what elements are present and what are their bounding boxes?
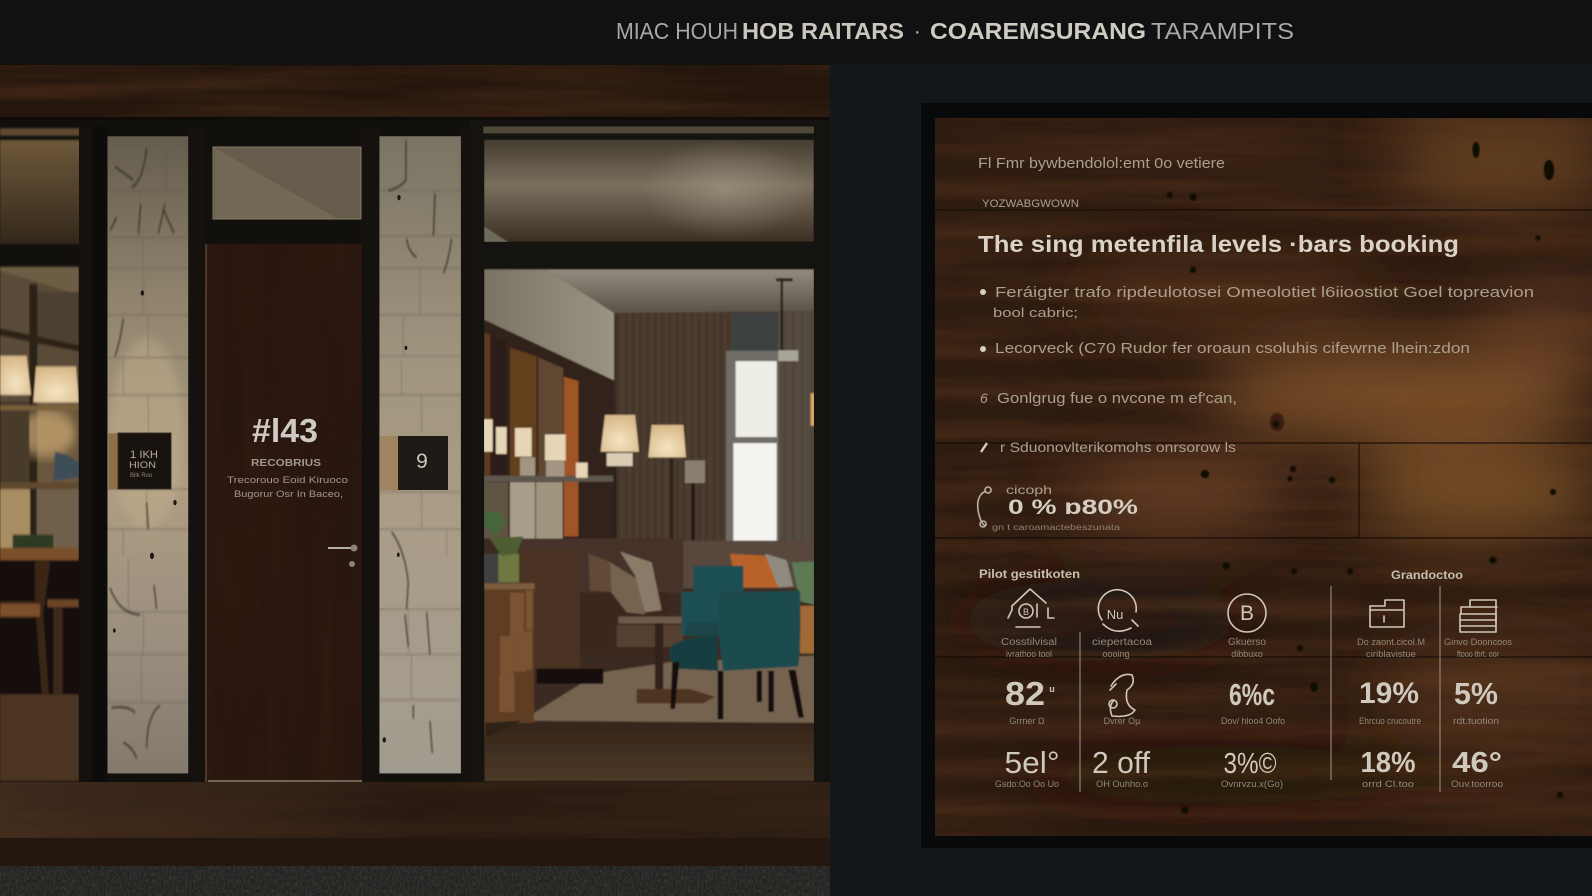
row two captions: rdt.tuotion [1453, 716, 1499, 726]
board wood [935, 115, 1592, 836]
wall sign: left: HION [129, 460, 156, 470]
row two captions [1009, 716, 1499, 726]
window frame bars [470, 120, 830, 800]
title: TARAMPITS [1151, 18, 1294, 44]
key stat: cicoph [1006, 483, 1052, 497]
upper window [484, 140, 814, 242]
icon labels: ivrathoo tool [1006, 649, 1052, 659]
row three figures: 2 off [1092, 745, 1150, 780]
wall sign: left: 1 IKH [130, 449, 158, 461]
bullet one [980, 285, 1534, 320]
icon labels: Do zaont.cicol.M [1357, 637, 1425, 647]
left stone panel [79, 127, 480, 790]
row two figures: u [1049, 684, 1055, 694]
icon: circled N [1098, 590, 1138, 631]
bullet list [980, 285, 1534, 455]
room ceiling [547, 270, 814, 313]
wall sign: right: 9 [416, 450, 428, 473]
icon: circled N: Nu [1107, 607, 1123, 622]
door text: RECOBRIUS [251, 458, 321, 469]
board frame [921, 103, 1592, 848]
pendant lamp [776, 278, 816, 426]
shelving [484, 320, 617, 539]
wood cabinet and vase [483, 510, 535, 736]
bullet one: bool cabric; [993, 305, 1078, 320]
window [726, 351, 779, 542]
row three figures: 3%© [1224, 748, 1276, 780]
left and right frame bars [79, 127, 107, 790]
left wall [484, 270, 614, 380]
row two figures: 5% [1454, 676, 1498, 711]
icon: house: B [1023, 607, 1029, 617]
title: MIAC HOUH [616, 18, 738, 44]
floor lamps [601, 415, 705, 541]
frame wall [0, 64, 830, 864]
row three figures: 46° [1452, 747, 1502, 779]
wall sign: left [118, 433, 171, 489]
panel: wooden information board [921, 103, 1592, 848]
dark door [205, 244, 362, 782]
icon labels: oooing [1102, 649, 1130, 659]
wooden ceiling beam [0, 65, 830, 120]
door room number: #l43 [252, 412, 318, 449]
left neighbouring room [0, 128, 81, 783]
title: HOB RAITARS [742, 18, 904, 44]
plank seams [935, 210, 1592, 657]
title [616, 18, 1294, 44]
board heading: The sing metenfila levels ·bars booking [978, 231, 1459, 257]
row three figures: 18% [1360, 747, 1416, 779]
wooden wall backing [108, 433, 119, 489]
door text: Trecorouo Eoid Kiruoco [227, 475, 348, 486]
icon: stack of cards [1460, 600, 1497, 632]
transom window [213, 147, 361, 219]
carpet [0, 866, 830, 896]
board eyebrow: YOZWABGWOWN [982, 198, 1079, 210]
right stone panel [379, 136, 461, 773]
metric grid [995, 589, 1513, 789]
row three figures: 5el° [1004, 745, 1060, 780]
icon labels: Ginvo Dooncoos [1444, 637, 1513, 647]
row two figures [1005, 675, 1498, 712]
rug [522, 656, 816, 723]
coffee table [618, 617, 715, 703]
wall sign: left: Bilk Roo [130, 473, 153, 479]
row two figures: 6%c [1229, 677, 1275, 712]
panel: hotel room entrance scene [0, 64, 830, 896]
row three captions: Gsdo:Oo Oo Uo [995, 779, 1059, 789]
section label: right metrics: Grandoctoo [1391, 568, 1463, 582]
room base [484, 268, 815, 781]
row three captions: Ovnrvzu.x(Go) [1221, 779, 1283, 789]
section label: left metrics: Pilot gestitkoten [979, 567, 1080, 581]
row three captions: orrd Cl.too [1362, 779, 1414, 789]
icon labels [1001, 637, 1513, 659]
row two captions: Dvrer Oµ [1104, 716, 1140, 726]
icon labels: Gkuerso [1228, 637, 1266, 648]
room floor [485, 723, 815, 781]
icon labels: dibbuxo [1231, 649, 1263, 659]
key stat: gn t caroamactebeszunata [992, 522, 1120, 532]
key stat: 0 % ɒ80% [1008, 496, 1138, 519]
icon: folder [1370, 600, 1404, 627]
row three captions [995, 779, 1503, 789]
icon labels: ciriblavistue [1366, 649, 1416, 659]
icon: house [1008, 589, 1054, 627]
sofa [518, 539, 815, 684]
cushions [588, 552, 815, 614]
icon labels: Cosstilvisal [1001, 637, 1057, 648]
icon: stat hook [978, 487, 991, 527]
icon: circled B [1228, 594, 1266, 632]
row two captions: Grrner Ω [1009, 716, 1045, 726]
title: · [914, 21, 921, 43]
bullet three: 6 [980, 390, 988, 406]
icon: circled B: B [1240, 602, 1254, 625]
icon: seated figure [1109, 674, 1135, 716]
title: COAREMSURANG [930, 18, 1146, 44]
bullet four: r Sduonovlterikomohs onrsorow ls [1000, 439, 1236, 455]
wall sign: right [398, 436, 448, 490]
teal armchairs [670, 566, 804, 719]
row two figures: 19% [1359, 677, 1419, 710]
row two figures: 82 [1005, 675, 1045, 712]
knots [1167, 142, 1563, 814]
row two captions: Ehrcuo crucoutre [1359, 716, 1421, 726]
row three captions: Ouv.toorroo [1451, 779, 1503, 789]
lounge room view [470, 120, 830, 800]
row two captions: Dov/ hloo4 Oofo [1221, 716, 1285, 726]
icon labels: ftooo thrt. oor [1457, 649, 1499, 659]
door text [227, 458, 348, 500]
board top line: Fl Fmr bywbendolol:emt 0o vetiere [978, 155, 1225, 172]
icon labels: ciepertacoa [1092, 637, 1153, 648]
bullet three: Gonlgrug fue o nvcone m ef'can, [997, 391, 1237, 407]
row three captions: OH Ouhho.o [1096, 779, 1148, 789]
bullet one: Feráigter trafo ripdeulotosei Omeolotiet l6iioostiot Goel topreavion [995, 285, 1534, 301]
door text: Bugorur Osr In Baceo, [234, 489, 343, 500]
row three figures [1004, 745, 1502, 780]
curtains [617, 313, 732, 541]
bullet two: Lecorveck (C70 Rudor fer oroaun csoluhis cifewrne lhein:zdon [995, 341, 1470, 357]
door handle [328, 544, 358, 567]
key stat [978, 483, 1138, 532]
walkway floor [0, 782, 830, 866]
